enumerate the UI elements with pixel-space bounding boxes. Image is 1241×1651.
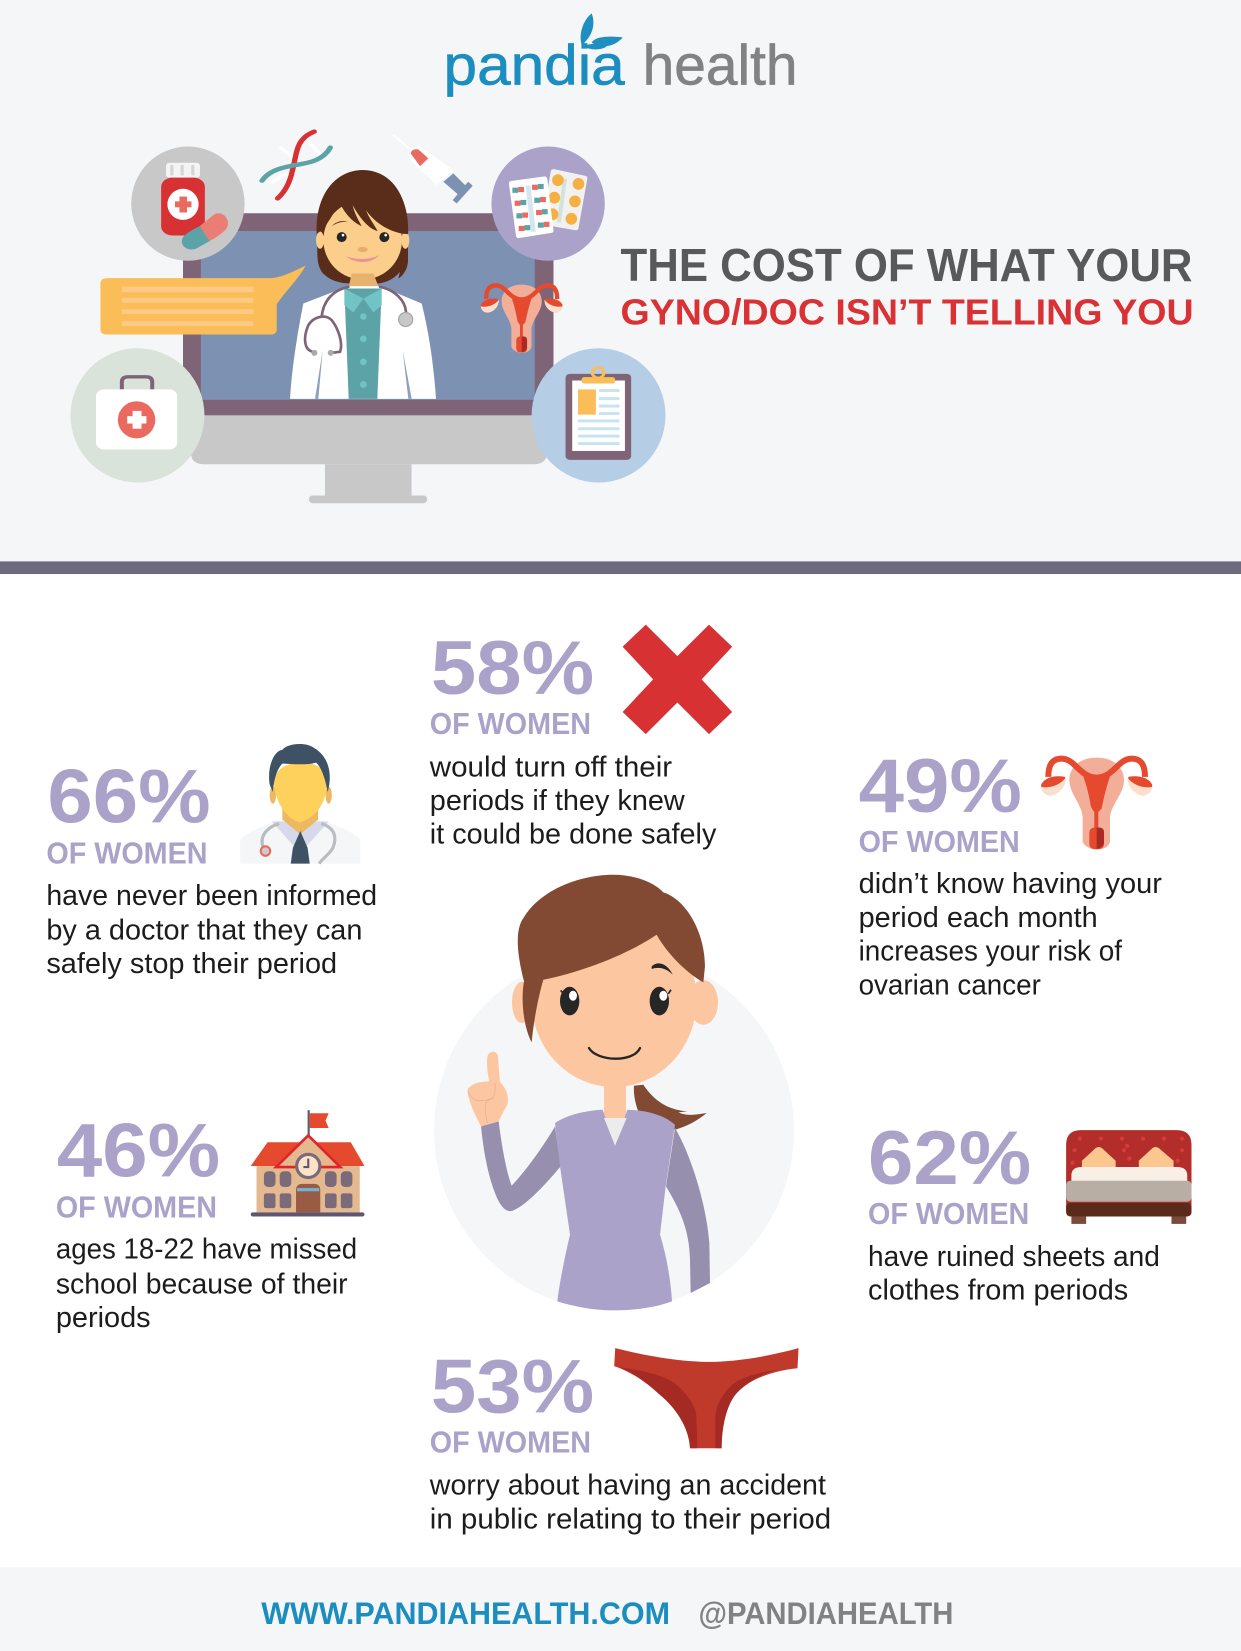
stat: 49%: OF WOMEN xyxy=(859,825,1020,859)
panel: header background xyxy=(0,0,1241,561)
face xyxy=(531,912,697,1087)
hand pointing xyxy=(467,1052,508,1126)
stat: 62%: have ruined sheets and xyxy=(868,1241,1160,1273)
stat: 53% xyxy=(429,1344,831,1535)
stat: 62%: 62% xyxy=(868,1116,1031,1201)
stat: 66%: OF WOMEN xyxy=(46,837,208,871)
stat: 66%: 66% xyxy=(47,755,211,840)
speech bubble xyxy=(100,266,306,335)
stat: 58%: would turn off their xyxy=(429,751,672,783)
circles and speech bubble xyxy=(71,146,666,482)
stat: 62% xyxy=(868,1116,1160,1307)
illustration: doctor on monitor xyxy=(71,132,666,503)
monitor screen xyxy=(201,231,535,400)
stat: 46%: ages 18-22 have missed xyxy=(56,1234,357,1266)
stat: 49%: 49% xyxy=(859,744,1022,829)
ponytail xyxy=(634,1085,707,1130)
stat: 58%: 58% xyxy=(431,626,594,711)
logo: pandia health: pandia xyxy=(444,34,625,97)
logo: pandia health xyxy=(444,13,797,97)
icon: small uterus on monitor xyxy=(481,285,563,353)
icon: underwear xyxy=(614,1348,799,1448)
icon: uterus xyxy=(1041,758,1152,850)
logo: pandia health: health xyxy=(643,34,797,97)
doctor figure xyxy=(290,170,436,399)
footer text xyxy=(261,1595,953,1631)
stat: 53%: 53% xyxy=(431,1344,594,1429)
stat: 66%: have never been informed xyxy=(46,880,377,912)
icon: school building xyxy=(251,1110,365,1217)
monitor frame xyxy=(183,213,553,415)
torso xyxy=(555,1110,675,1310)
stat: 49%: didn’t know having your xyxy=(859,868,1162,900)
icon: syringe xyxy=(393,135,473,203)
title xyxy=(620,239,1194,332)
panel: footer background xyxy=(0,1567,1241,1651)
icon: red X xyxy=(623,625,732,734)
illustration: woman pointing up xyxy=(434,875,794,1310)
stat: 66%: by a doctor that they can xyxy=(46,915,362,947)
stat: 62%: clothes from periods xyxy=(868,1275,1128,1307)
stat: 46%: school because of their xyxy=(56,1268,348,1300)
icon: pill packs circle xyxy=(491,146,605,261)
right arm sleeve xyxy=(666,1128,710,1293)
stat: 49% xyxy=(859,744,1162,1001)
stat: 46% xyxy=(56,1109,357,1334)
monitor stand xyxy=(191,415,547,503)
stat: 58% xyxy=(429,626,717,851)
header divider bar xyxy=(0,561,1241,574)
stat: 46%: OF WOMEN xyxy=(56,1191,217,1225)
undershirt xyxy=(604,1118,627,1146)
background circle xyxy=(434,950,794,1310)
icon: first aid kit circle xyxy=(71,348,204,482)
icon: clipboard circle xyxy=(532,348,666,482)
monitor and props xyxy=(183,132,553,503)
stat: 46%: periods xyxy=(56,1302,151,1334)
stat: 66% xyxy=(46,755,377,980)
stat: 53%: in public relating to their period xyxy=(430,1503,831,1535)
footer text: @PANDIAHEALTH xyxy=(698,1595,953,1631)
stat: 58%: periods if they knew xyxy=(430,785,685,817)
icon: logo leaves xyxy=(581,13,623,49)
stat: 49%: increases your risk of xyxy=(859,936,1122,968)
hair xyxy=(518,875,705,1042)
title: GYNO/DOC ISN’T TELLING YOU xyxy=(620,292,1194,332)
footer text: WWW.PANDIAHEALTH.COM xyxy=(261,1595,670,1631)
icon: medicine bottle circle xyxy=(131,146,245,261)
icon: bed xyxy=(1066,1130,1191,1224)
stat: 46%: 46% xyxy=(57,1109,220,1194)
stat: 49%: period each month xyxy=(859,902,1098,934)
stat: 58%: OF WOMEN xyxy=(430,707,591,741)
stat: 53%: worry about having an accident xyxy=(429,1470,826,1502)
stat: 62%: OF WOMEN xyxy=(868,1197,1029,1231)
stat: 66%: safely stop their period xyxy=(46,948,337,980)
stat: 58%: it could be done safely xyxy=(430,819,717,851)
icon: DNA strand xyxy=(262,132,330,198)
icon: male doctor xyxy=(240,744,360,864)
stat: 53%: OF WOMEN xyxy=(430,1425,591,1459)
left arm sleeve xyxy=(481,1121,561,1211)
eyes and smile xyxy=(560,963,673,1059)
neck and ears xyxy=(512,980,718,1118)
stat: 49%: ovarian cancer xyxy=(859,969,1041,1001)
figure, syringe and uterus on screen xyxy=(290,135,563,399)
title: THE COST OF WHAT YOUR xyxy=(620,239,1193,291)
